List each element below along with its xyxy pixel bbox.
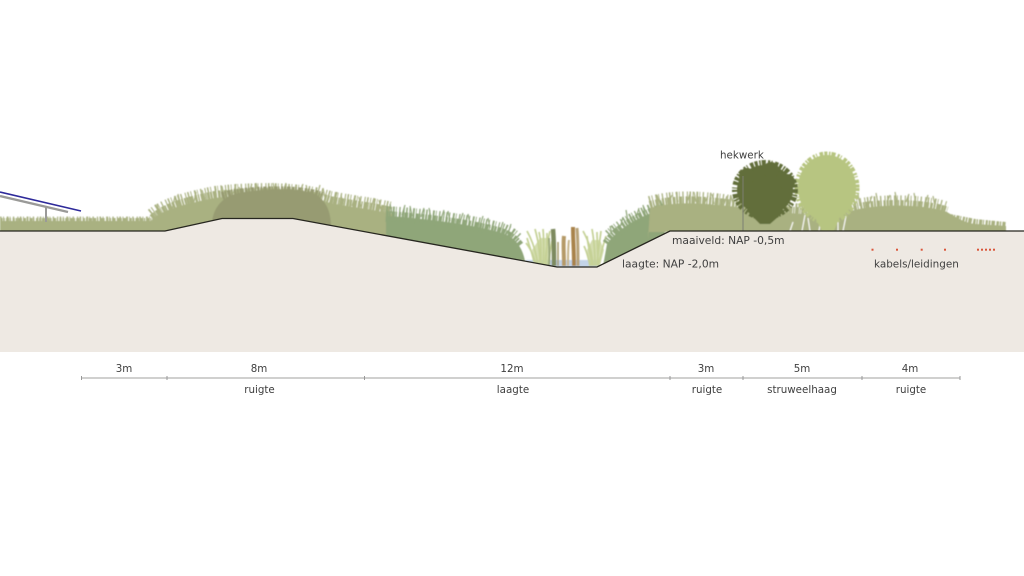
zone labels [244,384,926,396]
solar panel [0,192,81,222]
grass: ruigte on embankment [150,183,392,245]
width labels: 4m [902,363,918,375]
reeds: light green left [526,229,552,266]
reeds: brown cattails [549,227,578,266]
width labels: 3m [116,363,132,375]
width labels [116,363,918,375]
cables and pipes [872,249,995,251]
white gaps between grass blades under hedge [790,212,846,231]
tree: dark green shrub [736,162,795,224]
ground cross-section [0,218,1024,352]
zone labels: ruigte [244,384,275,396]
label: laagte: laagte: NAP -2,0m [622,258,719,270]
width labels: 5m [794,363,810,375]
grass: green laagte slope [386,204,526,268]
ground line [0,218,1024,267]
width labels: 3m [698,363,714,375]
water in ditch [526,260,600,268]
width labels: 8m [251,363,267,375]
dimension ruler [81,376,960,380]
zone labels: laagte [497,384,529,396]
label: hekwerk: hekwerk [720,150,764,162]
fence post [742,176,744,231]
tree: light green shrub [798,155,856,231]
grass: ruigte far right [845,192,1006,232]
grass: low strip under solar panels [0,220,165,232]
zone labels: ruigte [896,384,926,396]
zone labels: struweelhaag [767,384,837,396]
label: maaiveld: maaiveld: NAP -0,5m [672,234,785,247]
grass: green lower right bank [603,200,665,268]
reeds: light green right [583,229,606,266]
dark shrub mound on embankment [212,189,331,226]
vegetation [0,155,1006,268]
zone labels: ruigte [692,384,722,396]
label: kabels/leidingen: kabels/leidingen [874,258,959,270]
grass: ruigte right of ditch [648,192,850,240]
width labels: 12m [500,363,524,375]
